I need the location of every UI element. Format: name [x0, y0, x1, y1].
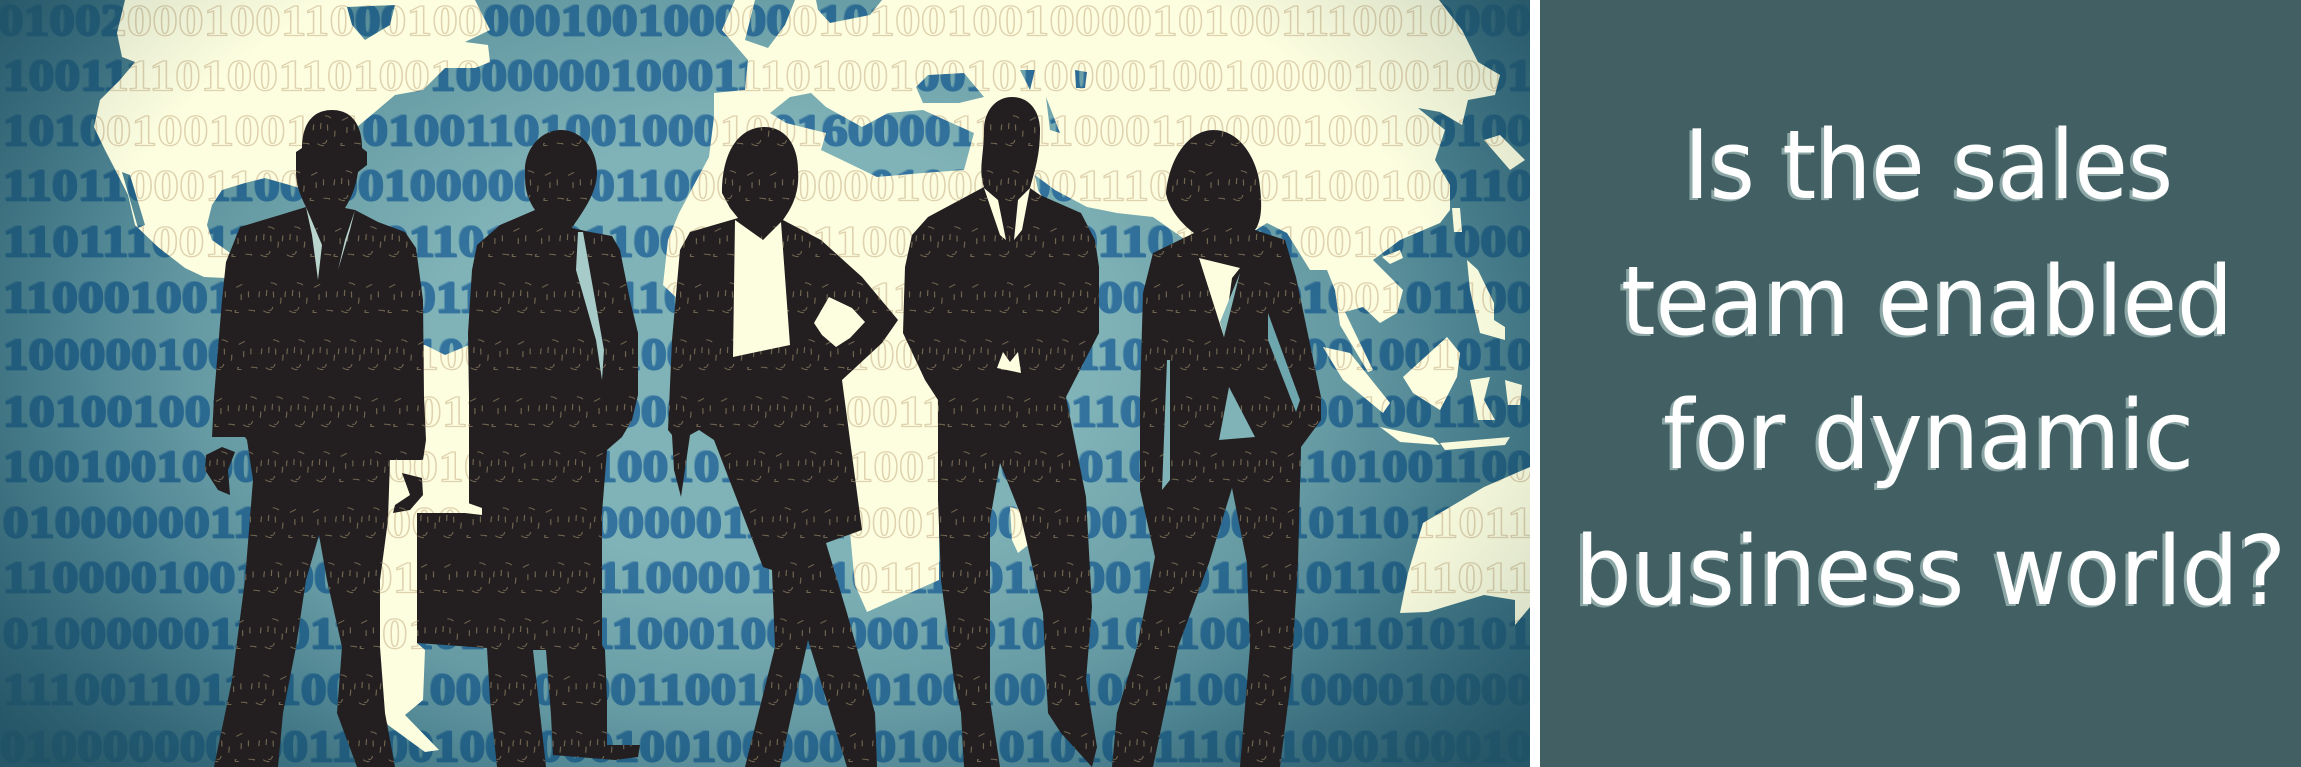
heading: question text: for dynamic [1663, 381, 2194, 491]
binary digits over the ocean: 100100100000010001001001001010100100101001010101001101001100 [3, 442, 1533, 491]
binary digits embossed on the land [0, 0, 1533, 658]
white divider [1530, 0, 1540, 767]
binary digits over the ocean: 100000100100000010011000100001001100000100110001000001001010 [3, 330, 1533, 379]
binary digits over the ocean: 101001001001010100110100100010016000011011000110000100100100 [3, 106, 1533, 155]
faint binary digits across the silhouettes: 111001101101000010000010011001000001001000100110001000010000 [3, 665, 1533, 714]
binary digits over the ocean: 010000001100111010100101100010011000100101010110010011010101 [3, 609, 1533, 658]
binary digits over the ocean [0, 0, 1533, 767]
binary digits over the ocean: 010000001101100000100100000011011000110001001000001011011011 [3, 498, 1533, 547]
binary digits over the ocean: 110110001100100100000110110001100001000000111001001100100110 [3, 161, 1533, 210]
faint binary digits across the silhouettes: 110001001100101101100100110101101011011010000110000100101100 [3, 273, 1533, 322]
faint binary digits across the silhouettes: 101001001001010100110100100010016000011011000110000100100100 [3, 106, 1533, 155]
faint binary digits across the silhouettes: 010000001100111010100101100010011000100101010110010011010101 [3, 609, 1533, 658]
binary digits embossed on the land: 100000100100000010011000100001001100000100110001000001001010 [3, 330, 1533, 379]
binary digits over the ocean: 101001001000001101111001000110001001111010110100100001001100 [3, 387, 1533, 436]
binary digits embossed on the land: 110110001100100100000110110001100001000000111001001100100110 [3, 161, 1533, 210]
faint binary digits across the silhouettes: 110110001100100100000110110001100001000000111001001100100110 [3, 161, 1533, 210]
panel: question [1540, 0, 2301, 767]
faint binary digits across the silhouettes: 101001001000001101111001000110001001111010110100100001001100 [3, 387, 1533, 436]
binary digits over the ocean: 110000100100000111001001100001011011100110001001111011011011 [3, 553, 1533, 602]
heading: question text [1575, 111, 2286, 627]
heading: question text: team enabled [1621, 247, 2233, 357]
binary digits embossed on the land: 101001001000001101111001000110001001111010110100100001001100 [3, 387, 1533, 436]
faint binary digits across the silhouettes: 110111001100110011011101100111001100001001011011101001011000 [3, 217, 1533, 266]
faint binary digits across the silhouettes: 110000100100000111001001100001011011100110001001111011011011 [3, 553, 1533, 602]
binary digits embossed on the land: 110000100100000111001001100001011011100110001001111011011011 [3, 553, 1533, 602]
heading: question text: Is the sales [1684, 111, 2173, 221]
faint binary digits across the silhouettes [205, 115, 1321, 762]
binary digits embossed on the land: 110001001100101101100100110101101011011010000110000100101100 [3, 273, 1533, 322]
land vignette [0, 0, 1530, 767]
binary digits embossed on the land: 100111101001101001000000100011101001001010000100100001001001 [3, 51, 1533, 100]
ocean vignette [0, 0, 1530, 767]
binary digits embossed on the land: 010000001100111010100101100010011000100101010110010011010101 [3, 609, 1533, 658]
binary digits over the ocean: 111001101101000010000010011001000001001000100110001000010000 [3, 665, 1533, 714]
binary digits over the ocean: 100111101001101001000000100011101001001010000100100001001001 [3, 51, 1533, 100]
faint binary digits across the silhouettes: 100000100100000010011000100001001100000100110001000001001010 [3, 330, 1533, 379]
binary digits over the ocean: 110001001100101101100100110101101011011010000110000100101100 [3, 273, 1533, 322]
binary digits embossed on the land: 110111001100110011011101100111001100001001011011101001011000 [3, 217, 1533, 266]
ocean background [0, 0, 1530, 767]
world map landmasses [94, 0, 1530, 752]
panel: photo of business team over world map [0, 0, 1533, 767]
binary digits over the ocean: 110111001100110011011101100111001100001001011011101001011000 [3, 217, 1533, 266]
silhouettes of five business people [205, 97, 1321, 767]
shirts and cut-out details on the silhouettes [306, 188, 1300, 515]
faint binary digits across the silhouettes: 010000001101100000100100000011011000110001001000001011011011 [3, 498, 1533, 547]
faint binary digits across the silhouettes: 100100100000010001001001001010100100101001010101001101001100 [3, 442, 1533, 491]
binary digits embossed on the land: 010000001101100000100100000011011000110001001000001011011011 [3, 498, 1533, 547]
binary digits embossed on the land: 100100100000010001001001001010100100101001010101001101001100 [3, 442, 1533, 491]
binary digits embossed on the land: 101001001001010100110100100010016000011011000110000100100100 [3, 106, 1533, 155]
